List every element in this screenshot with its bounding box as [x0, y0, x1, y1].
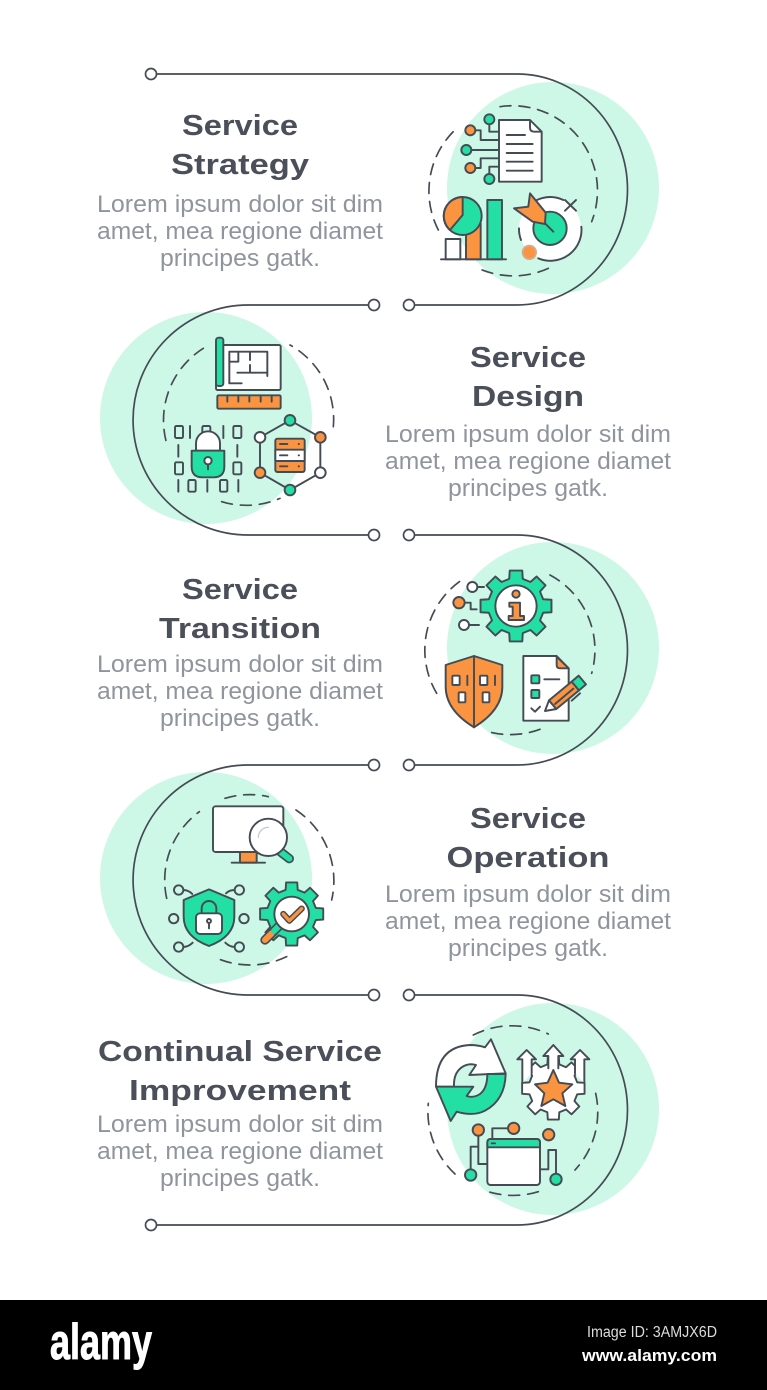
panel: service transition: [97, 530, 659, 770]
text block: continual service improvement: amet, mea regione diamet: [97, 1138, 383, 1165]
text block: service operation: principes gatk.: [448, 935, 608, 962]
icon group: improvement: [428, 1026, 598, 1195]
footer image id: Image ID: 3AMJX6D: [587, 1324, 717, 1341]
panel: service design: [100, 300, 671, 540]
heading: service design: Service: [470, 342, 586, 374]
heading: continual service improvement: [98, 1036, 382, 1107]
text block: service strategy: amet, mea regione diamet: [97, 218, 383, 245]
text block: service transition: amet, mea regione diamet: [97, 678, 383, 705]
text block: service transition: [97, 651, 383, 732]
text block: service strategy: [97, 191, 383, 272]
text block: service operation: Lorem ipsum dolor sit dim: [385, 881, 671, 908]
heading: service transition: Service: [182, 574, 298, 606]
icon group: transition: [425, 571, 595, 735]
icon group: operation: [165, 795, 334, 965]
footer bar: [0, 1300, 767, 1390]
heading: service design: [470, 342, 586, 413]
text block: service design: Lorem ipsum dolor sit dim: [385, 421, 671, 448]
text block: continual service improvement: Lorem ipsum dolor sit dim: [97, 1111, 383, 1138]
text block: service transition: principes gatk.: [160, 705, 320, 732]
text block: service operation: amet, mea regione diamet: [385, 908, 671, 935]
text block: continual service improvement: principes gatk.: [160, 1165, 320, 1192]
heading: service transition: Transition: [159, 613, 321, 645]
text block: service strategy: principes gatk.: [160, 245, 320, 272]
heading: service transition: [159, 574, 321, 645]
heading: service operation: Operation: [446, 842, 610, 874]
panel: service strategy: [97, 68, 659, 310]
text block: service design: [385, 421, 671, 502]
heading: continual service improvement: Improvement: [129, 1075, 351, 1107]
heading: continual service improvement: Continual Service: [98, 1036, 382, 1068]
text block: continual service improvement: [97, 1111, 383, 1192]
text block: service design: amet, mea regione diamet: [385, 448, 671, 475]
panel: service operation: [100, 760, 671, 1000]
heading: service strategy: Strategy: [171, 149, 309, 181]
text block: service strategy: Lorem ipsum dolor sit dim: [97, 191, 383, 218]
text block: service design: principes gatk.: [448, 475, 608, 502]
heading: service operation: Service: [470, 803, 586, 835]
text block: service operation: [385, 881, 671, 962]
panel: continual service improvement: [97, 990, 659, 1230]
heading: service strategy: [171, 110, 309, 181]
footer url: www.alamy.com: [581, 1346, 717, 1365]
text block: service transition: Lorem ipsum dolor sit dim: [97, 651, 383, 678]
footer logo: alamy: [50, 1314, 152, 1370]
heading: service strategy: Service: [182, 110, 298, 142]
heading: service operation: [446, 803, 610, 874]
heading: service design: Design: [472, 381, 584, 413]
icon group: strategy: [429, 106, 597, 276]
icon group: design: [163, 338, 334, 505]
